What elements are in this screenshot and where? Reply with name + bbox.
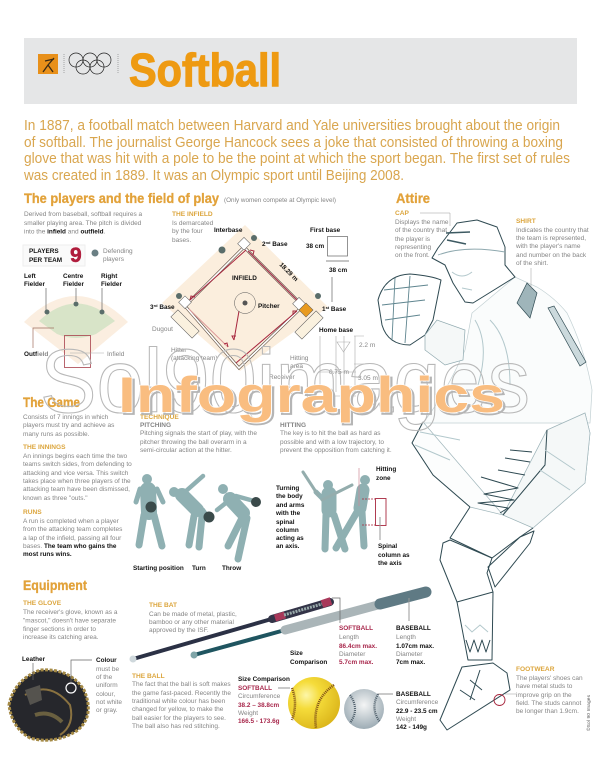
pitcher: leg stripes — [415, 432, 575, 513]
heading: players and field: (Only women compete at Olympic level) — [224, 197, 336, 204]
text: the glove: "mascot," doesn't have separate — [23, 618, 116, 624]
pitcher: shoe — [440, 663, 510, 730]
panel: technique: pitcher throwing the ball overarm in a — [140, 439, 247, 446]
bat comparison table: 7cm max. — [396, 659, 425, 666]
text: cap: on the front. — [395, 252, 430, 259]
hitting zone: zone — [376, 475, 391, 482]
figure: turn — [170, 476, 214, 547]
icon: olympic rings — [64, 53, 118, 74]
panel: the game text: attacking and vice versa. This switch — [23, 470, 129, 477]
text: the ball: changed for yellow, to make the — [132, 706, 224, 713]
infield labels: rd — [154, 303, 158, 308]
panel: the game text — [23, 394, 132, 558]
softball figures: 166.5 - 173.6g — [238, 718, 280, 725]
text: footwear: improve grip on the — [516, 692, 572, 699]
text: the glove: The receiver's glove, known as a — [23, 609, 118, 616]
pitcher: trousers — [412, 413, 590, 528]
infield labels: 3 — [150, 304, 154, 311]
infield labels: nd — [266, 240, 271, 245]
play arrows — [189, 250, 297, 363]
panel: technique: The key is to hit the ball as hard as — [280, 430, 381, 437]
infield labels: Hitter — [171, 347, 187, 354]
hitting caption — [275, 485, 305, 550]
text: field description: into the infield and outfield. — [24, 228, 106, 236]
pitching captions: Turn — [192, 565, 206, 572]
softball figures: SOFTBALL — [238, 685, 272, 692]
text: the bat — [149, 602, 237, 634]
text: the bat: approved by the ISF. — [149, 627, 209, 634]
text: the glove: finger sections in order to — [23, 626, 96, 633]
bat comparison table: Size — [290, 650, 303, 657]
text: footwear — [505, 666, 583, 715]
text: the glove: increase its catching area. — [23, 634, 99, 641]
watermark: infographics letters: Infographics — [118, 367, 505, 423]
hitting caption: Turning — [276, 485, 299, 492]
bat comparison table: Diameter — [339, 651, 366, 658]
fielder labels: Fielder — [101, 281, 122, 288]
softball figures: Size Comparison — [238, 676, 290, 683]
panel: the game text: RUNS — [23, 509, 42, 516]
home base detail — [318, 327, 378, 396]
hitting zone — [359, 466, 410, 567]
panel: the game text: teams switch sides, from defending to — [23, 461, 132, 468]
text: the ball: The fact that the ball is soft makes — [132, 681, 231, 688]
bat comparison table: Length — [396, 634, 416, 641]
pitcher: lower leg — [440, 507, 534, 660]
text: cap: CAP — [395, 210, 410, 217]
text: shirt: SHIRT — [516, 218, 536, 225]
baseball — [344, 689, 393, 729]
bat comparison table — [290, 598, 434, 666]
field shape: Infield — [107, 351, 125, 358]
glove photo: of the — [96, 674, 113, 681]
infield labels: Hitting — [290, 355, 309, 362]
watermark: infographics grey shadow outline: Infographics — [120, 369, 507, 425]
intro text: glove that was hit with a pole to be the point at which the sport began. The first set of rules — [24, 151, 570, 167]
players per team — [23, 244, 133, 267]
field shape — [24, 288, 128, 368]
bat comparison table: SOFTBALL — [339, 625, 373, 632]
baseball figures: Weight — [396, 716, 416, 723]
glove photo: or gray. — [96, 707, 118, 714]
infield labels: Base — [270, 241, 288, 248]
baseball figures: Circumference — [396, 699, 439, 706]
first base detail: 38 cm — [306, 243, 324, 250]
text: footwear: FOOTWEAR — [516, 666, 555, 673]
fielder labels: Fielder — [63, 281, 84, 288]
field shape: Outfield — [24, 351, 48, 358]
heading: players and field: The players and the field of play — [24, 190, 219, 206]
bat comparison table: BASEBALL — [396, 625, 431, 632]
panel: technique: HITTING — [280, 422, 306, 429]
glove photo: not white — [96, 699, 122, 706]
pitcher: head and cap — [432, 220, 515, 303]
text: the glove — [23, 600, 118, 641]
panel: infield diagram — [150, 211, 378, 396]
text: footwear: have metal studs to — [516, 683, 573, 690]
text: cap: of the country that — [395, 227, 447, 234]
panel: the game text: bases. The team who gains the — [23, 543, 117, 550]
baseball figures: 142 - 149g — [396, 724, 427, 731]
players per team: PLAYERS — [29, 248, 59, 255]
text: the bat: Can be made of metal, plastic, — [149, 611, 237, 618]
panel: the game text: many runs as possible. — [23, 431, 90, 438]
text: shirt — [515, 218, 589, 290]
panel: attire — [378, 190, 592, 731]
panel: technique: Pitching signals the start of play, with the — [140, 430, 257, 437]
intro text — [23, 118, 570, 184]
hitting caption: spinal — [276, 519, 295, 526]
watermark: outline wordmark: Sol90images — [40, 332, 530, 432]
hitting zone: the axis — [378, 560, 402, 567]
first base detail: First base — [310, 227, 341, 234]
bat comparison table: Diameter — [396, 651, 423, 658]
infield labels: Interbase — [214, 227, 243, 234]
home base detail: 0.75 m — [329, 369, 349, 376]
hitting zone: Spinal — [378, 543, 397, 550]
baseball bat — [190, 592, 426, 658]
base lines — [185, 247, 303, 368]
panel: the game text: from the attacking team completes — [23, 526, 123, 533]
panel: outfield diagram — [23, 211, 143, 368]
text: footwear: field. The studs cannot — [516, 700, 581, 707]
figure: throw — [217, 484, 261, 559]
bat comparison table: Length — [339, 634, 359, 641]
pitcher circle: Pitcher — [258, 303, 280, 310]
text: cap: Displays the name — [395, 219, 449, 226]
text: the bat: bamboo or any other material — [149, 619, 234, 626]
text: the glove: THE GLOVE — [23, 600, 62, 607]
panel: technique: PITCHING — [140, 422, 171, 429]
glove photo: must be — [96, 666, 120, 673]
credit: ©Sol 90 Images — [585, 694, 592, 731]
text: the ball: ball easier for the players to see. — [132, 715, 226, 722]
first base detail — [306, 227, 349, 302]
heading: players and field — [24, 190, 336, 206]
bat comparison table: 86.4cm max. — [339, 643, 377, 650]
players per team: PER TEAM — [29, 257, 62, 264]
panel: the game text: takes place when three players of the — [23, 478, 131, 485]
infield labels: 18.29 m — [278, 261, 299, 283]
hitting caption: with the — [275, 510, 301, 517]
fielder labels: Centre — [63, 273, 84, 280]
text: shirt: and number on the back — [516, 252, 587, 259]
glove photo: Colour — [96, 657, 117, 664]
hitting zone: Hitting — [376, 466, 396, 473]
home base detail: 3.05 m — [358, 375, 378, 382]
bat comparison table: 1.07cm max. — [396, 643, 434, 650]
softball bat — [130, 601, 331, 662]
heading: equipment: Equipment — [23, 577, 87, 593]
softball figures — [238, 676, 290, 725]
hitting caption: acting as — [276, 535, 304, 542]
hitting caption: column — [276, 527, 299, 534]
pitcher: glove and arm — [378, 274, 465, 365]
text: shirt: with the player's name — [515, 243, 581, 250]
text: cap: the player is — [395, 236, 431, 243]
bases — [171, 237, 323, 339]
baseball figures: 22.9 - 23.5 cm — [396, 708, 438, 715]
fielder labels: Right — [101, 273, 118, 280]
glove photo — [9, 656, 122, 740]
intro text: of softball. The journalist George Hancock sees a joke that consisted of throwing a boxing — [24, 135, 563, 151]
players per team: Defending — [103, 248, 133, 255]
infield labels: area — [290, 363, 303, 370]
infield labels: st — [326, 305, 330, 310]
text: footwear: The players' shoes can — [516, 675, 583, 682]
home base detail: 2.2 m — [359, 342, 375, 349]
panel: the game text: A run is completed when a player — [23, 518, 120, 525]
baseball figures: BASEBALL — [396, 691, 431, 698]
figure: starting position — [136, 474, 163, 546]
text: cap: representing — [395, 244, 432, 251]
softball figures: Circumference — [238, 693, 281, 700]
infield labels: bases. — [172, 237, 191, 244]
text: the ball: The ball also has red stitching. — [132, 723, 220, 730]
text: the bat: THE BAT — [149, 602, 177, 609]
infield labels: 1 — [322, 306, 326, 313]
intro text: In 1887, a football match between Harvard and Yale universities brought about the origin — [24, 118, 560, 134]
pitching captions — [133, 565, 241, 572]
fielder labels — [24, 273, 122, 288]
panel: technique: TECHNIQUE — [140, 414, 179, 421]
players per team: players — [103, 256, 125, 263]
panel: the game text: THE INNINGS — [23, 444, 66, 451]
infield labels: Receiver — [269, 374, 295, 381]
infield labels: Base — [158, 304, 175, 311]
text: the ball — [132, 673, 231, 730]
infield labels: by the four — [172, 228, 204, 235]
infield labels: Is demarcated — [172, 220, 214, 227]
fielder labels: Left — [24, 273, 37, 280]
text: field description: smaller playing area. The pitch is divided — [24, 220, 142, 227]
panel: the game text: a lap of the infield, passing all four — [23, 535, 122, 542]
glove photo: Leather — [22, 656, 46, 663]
fielder labels: Fielder — [24, 281, 45, 288]
infield labels — [150, 211, 347, 381]
panel: the game text: attacking team have been dismissed, — [23, 486, 130, 493]
pitcher: shirt and torso — [423, 277, 592, 423]
icon: softball pictogram — [38, 54, 58, 74]
infield labels: Dugout — [152, 326, 173, 333]
pitching captions: Starting position — [133, 565, 184, 572]
text: shirt: the team is represented, — [516, 235, 586, 242]
heading: the game: The Game — [23, 394, 80, 410]
softball — [288, 677, 340, 729]
text: the ball: the game fast-paced. Recently the — [132, 690, 231, 697]
intro text: was created in 1889. It was an Olympic sport until Beijing 2008. — [23, 168, 404, 184]
players per team: 9 — [70, 244, 82, 267]
hitting caption: the body — [276, 493, 303, 500]
figure: batter follow through — [322, 476, 370, 548]
header band — [24, 38, 577, 104]
text: shirt: of the shirt. — [516, 260, 548, 267]
first base detail: 38 cm — [329, 267, 347, 274]
panel: equipment — [9, 577, 439, 740]
pitcher circle — [234, 292, 280, 314]
panel: the game text: known as three "outs." — [23, 495, 88, 502]
panel: technique — [133, 414, 410, 572]
infield labels: THE INFIELD — [172, 211, 213, 218]
heading: attire: Attire — [396, 190, 430, 206]
text: shirt: Indicates the country that — [516, 227, 589, 234]
infield labels: (attacking team) — [171, 355, 218, 362]
infield labels: Base — [329, 306, 347, 313]
title: Softball — [129, 44, 281, 96]
pitching captions: Throw — [222, 565, 241, 572]
panel: technique: prevent the opposition from catching it. — [280, 447, 392, 454]
text: field description — [24, 211, 143, 236]
panel: technique: possible and with a low trajectory, to — [280, 439, 384, 446]
glove photo: uniform — [96, 682, 118, 689]
text: the ball: THE BALL — [132, 673, 165, 680]
text: field description: Derived from baseball, softball requires a — [24, 211, 143, 218]
softball figures: Weight — [238, 710, 258, 717]
panel: the game text: An innings begins each time the two — [23, 453, 127, 460]
text: cap — [395, 210, 450, 259]
glove photo: colour, — [96, 691, 115, 698]
watermark: infographics — [118, 367, 507, 425]
bat comparison table: Comparison — [290, 659, 327, 666]
panel: the game text: Consists of 7 innings in which — [23, 414, 109, 421]
hitting caption: and arms — [276, 502, 305, 509]
home base detail: Home base — [319, 327, 354, 334]
bat comparison table: 5.7cm max. — [339, 659, 374, 666]
fielder icons — [176, 235, 321, 299]
baseball figures — [396, 691, 439, 731]
infield labels: 2 — [262, 241, 266, 248]
panel: the game text: most runs wins. — [23, 551, 72, 558]
softball figures: 38.2 – 38.8cm — [238, 702, 280, 709]
panel: the game text: players must try and achieve as — [23, 422, 115, 429]
pitcher line drawing — [378, 220, 592, 730]
text: footwear: be longer than 1.9cm. — [516, 708, 579, 715]
panel: technique: semi-circular action at the hitter. — [140, 447, 232, 454]
hitting caption: an axis. — [276, 543, 300, 550]
infield labels: INFIELD — [232, 275, 257, 282]
infield peach diamond — [162, 225, 328, 371]
hitting zone: column as — [378, 552, 410, 559]
text: the ball: traditional white colour has been — [132, 698, 226, 705]
figure: batter — [303, 472, 345, 549]
